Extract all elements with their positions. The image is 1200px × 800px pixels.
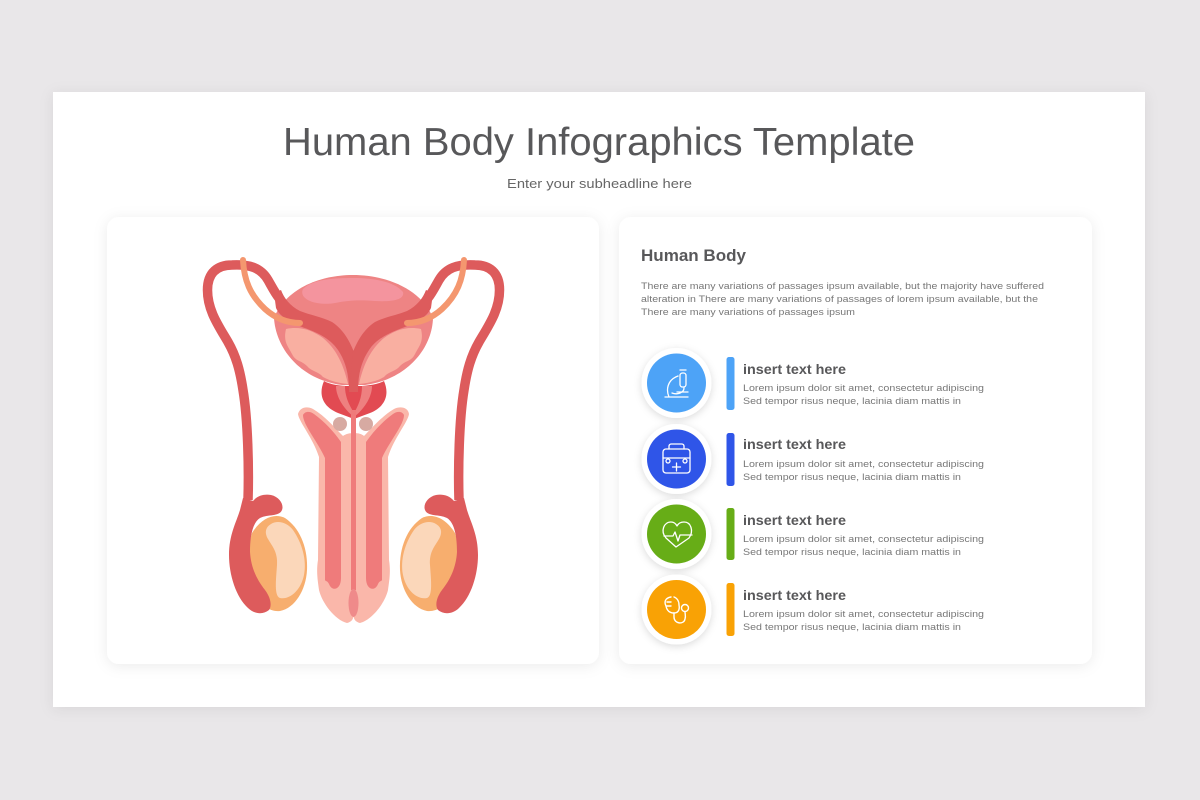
panel paragraph: There are many variations of passages ipsum available, but the majority have suffered <box>641 281 1044 292</box>
list item 1: Sed tempor risus neque, lacinia diam mattis in <box>743 396 961 407</box>
penile shaft <box>298 407 409 623</box>
icon: medical kit <box>663 444 690 473</box>
list item 2: Sed tempor risus neque, lacinia diam mattis in <box>743 472 961 483</box>
seminal ducts and testes (right) <box>349 260 500 613</box>
list item 4 <box>642 574 984 644</box>
list item 3: Sed tempor risus neque, lacinia diam mattis in <box>743 547 961 558</box>
icon: stethoscope <box>665 597 688 623</box>
panel: anatomy illustration <box>107 217 599 664</box>
panel paragraph: alteration in There are many variations of passages of lorem ipsum available, but the <box>641 294 1038 305</box>
subheadline: Enter your subheadline here <box>507 176 692 191</box>
bladder <box>274 275 433 385</box>
slide card <box>53 92 1145 707</box>
icon: heart with pulse <box>663 522 692 547</box>
list item 1: Lorem ipsum dolor sit amet, consectetur adipiscing <box>743 383 984 394</box>
seminal ducts and testes (left) <box>208 260 358 613</box>
panel heading: Human Body <box>641 246 747 265</box>
list item 4: Lorem ipsum dolor sit amet, consectetur adipiscing <box>743 609 984 620</box>
list item 3 <box>642 499 984 569</box>
icon: microscope <box>665 370 688 397</box>
prostate <box>322 381 386 419</box>
list item 4: Sed tempor risus neque, lacinia diam mattis in <box>743 622 961 633</box>
list item 3: Lorem ipsum dolor sit amet, consectetur adipiscing <box>743 534 984 545</box>
list item 2: insert text here <box>743 436 846 452</box>
panel paragraph: There are many variations of passages ipsum <box>641 307 855 318</box>
illustration: male reproductive system <box>208 260 500 623</box>
list item 2 <box>642 424 984 494</box>
title: Human Body Infographics Template <box>283 121 915 164</box>
list item 3: insert text here <box>743 512 846 528</box>
list item 1: insert text here <box>743 361 846 377</box>
list item 4: insert text here <box>743 587 846 603</box>
panel paragraph <box>641 281 1044 318</box>
bulbourethral glands <box>333 417 347 431</box>
list item 2: Lorem ipsum dolor sit amet, consectetur adipiscing <box>743 459 984 470</box>
panel: text and list <box>619 217 1092 664</box>
list item 1 <box>642 348 984 418</box>
